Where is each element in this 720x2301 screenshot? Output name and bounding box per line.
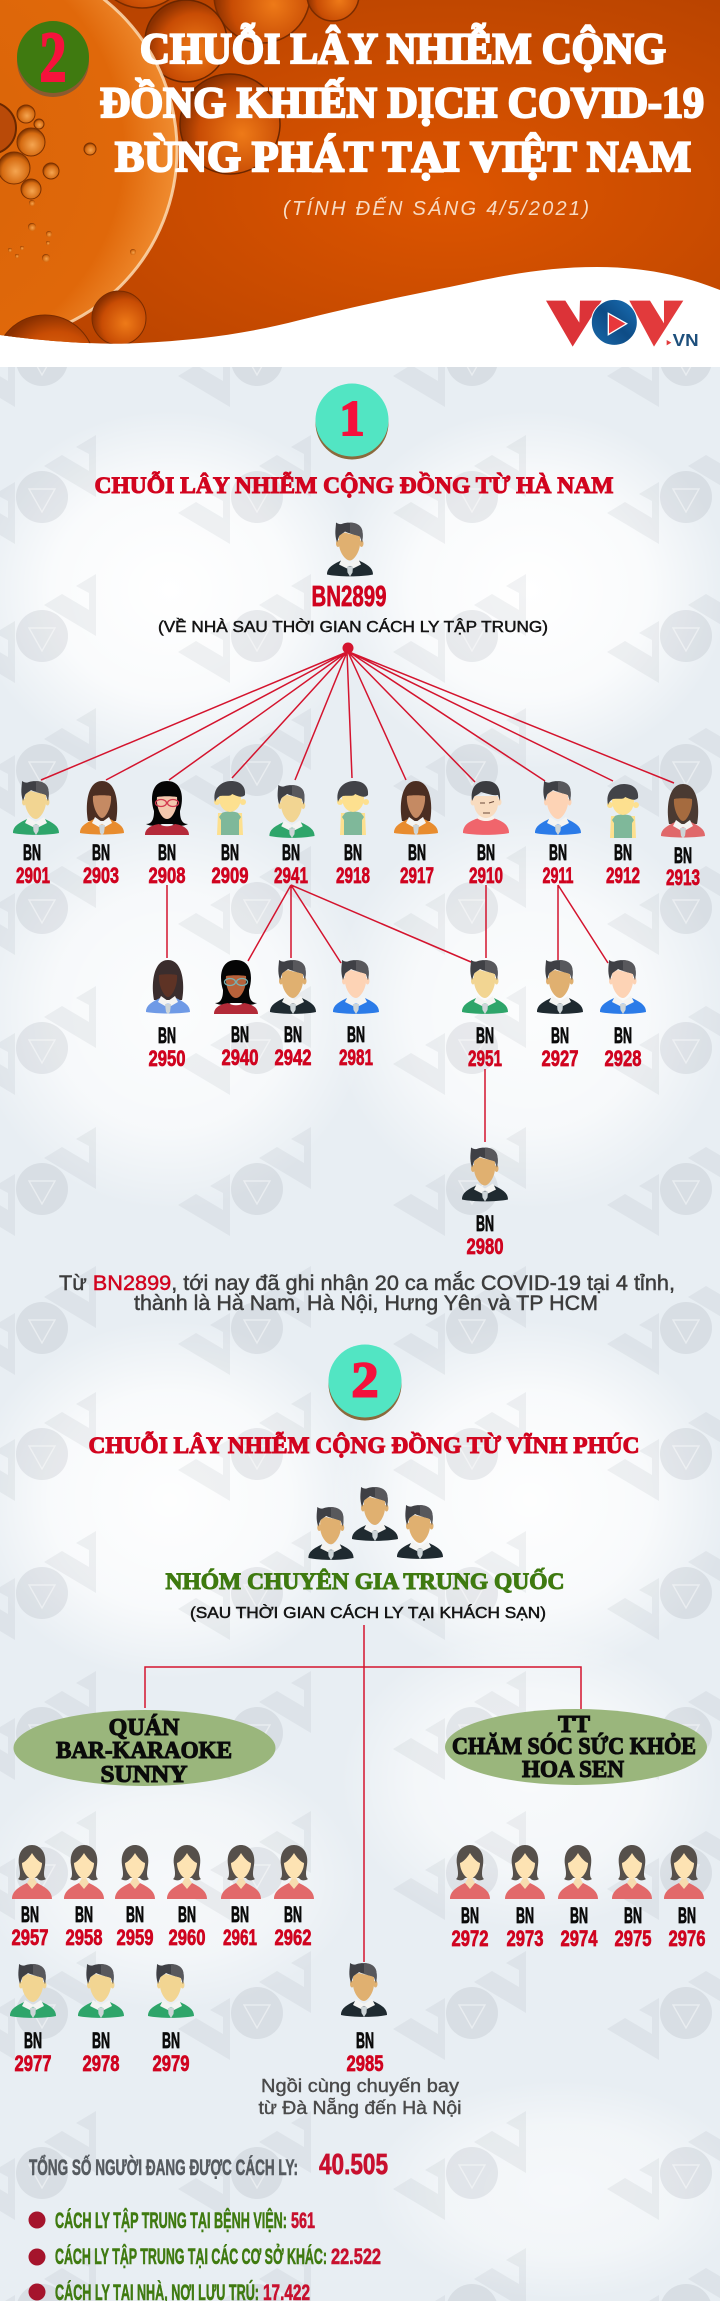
- section 1 summary text: [59, 1272, 675, 1315]
- patient 2928: BN: [614, 1023, 632, 1048]
- icon: VOV logo: VN: [673, 330, 699, 350]
- title number badge: 2: [40, 17, 66, 97]
- patient 2901: [13, 781, 59, 888]
- patient 2957: 2957: [12, 1925, 48, 1950]
- patient 2918: [336, 781, 370, 888]
- patient 2910: BN: [477, 840, 495, 865]
- patient 2961: BN: [231, 1902, 249, 1927]
- patient 2960: 2960: [168, 1925, 206, 1950]
- quarantine item: other facilities: [28, 2244, 381, 2269]
- patient 2911: [535, 781, 581, 888]
- patient 2980: 2980: [466, 1234, 504, 1259]
- patient 2911: BN: [549, 840, 567, 865]
- total quarantined: TỔNG SỐ NGƯỜI ĐANG ĐƯỢC CÁCH LY:: [29, 2154, 298, 2180]
- patient 2928: [600, 960, 646, 1071]
- note for patient 2985: từ Đà Nẵng đến Hà Nội: [258, 2098, 462, 2118]
- patient 2927: BN: [551, 1023, 569, 1048]
- patient 2976: 2976: [668, 1926, 706, 1951]
- cluster oval: Hoa Sen: CHĂM SÓC SỨC KHỎE: [452, 1733, 696, 1760]
- title: ĐỒNG KHIẾN DỊCH COVID-19: [100, 79, 704, 127]
- patient 2962: 2962: [274, 1925, 312, 1950]
- patient 2918: BN: [344, 840, 362, 865]
- patient 2959: 2959: [116, 1925, 154, 1950]
- patient 2961: 2961: [223, 1925, 257, 1950]
- patient 2978: [78, 1964, 124, 2076]
- section 1 number badge: [316, 384, 388, 460]
- orange bubble background: [0, 0, 720, 344]
- patient 2941: BN: [282, 840, 300, 865]
- patient 2957: BN: [21, 1902, 39, 1927]
- quarantine item: home: [28, 2280, 310, 2301]
- patient 2942: BN: [284, 1022, 302, 1047]
- patient 2972: BN: [461, 1903, 479, 1928]
- patient 2977: [10, 1964, 56, 2076]
- patient 2908: [145, 781, 189, 888]
- title: CHUỖI LÂY NHIỄM CỘNG: [140, 24, 666, 73]
- quarantine item: hospital: 561: [291, 2208, 315, 2233]
- patient 2973: 2973: [506, 1926, 544, 1951]
- patient 2961: [221, 1845, 261, 1950]
- total quarantined: 40.505: [319, 2149, 388, 2181]
- patient 2941: [269, 785, 315, 888]
- patient 2912: [606, 784, 640, 888]
- patient 2976: [664, 1845, 706, 1951]
- root patient BN2899: BN2899: [312, 581, 386, 613]
- icon: group of three experts: [308, 1487, 443, 1560]
- patient 2941: 2941: [274, 863, 308, 888]
- patient 2912: 2912: [606, 863, 640, 888]
- patient 2909: BN: [221, 840, 239, 865]
- patient 2911: 2911: [542, 863, 574, 888]
- patient 2975: BN: [624, 1903, 642, 1928]
- patient 2928: 2928: [604, 1046, 642, 1071]
- quarantine item: other facilities: 22.522: [331, 2244, 381, 2269]
- section 1 number badge: 1: [340, 390, 364, 446]
- patient 2942: 2942: [274, 1045, 312, 1070]
- patient 2909: 2909: [212, 863, 248, 888]
- patient 2973: BN: [516, 1903, 534, 1928]
- cluster oval: Sunny: QUÁN: [109, 1715, 180, 1741]
- patient 2960: [167, 1845, 207, 1950]
- patient 2950: 2950: [148, 1046, 186, 1071]
- patient 2973: [505, 1845, 545, 1951]
- patient 2909: [212, 781, 248, 888]
- patient 2917: 2917: [400, 863, 434, 888]
- cluster oval: Hoa Sen: TT: [558, 1712, 590, 1738]
- patient 2903: BN: [92, 840, 110, 865]
- patient 2958: [64, 1845, 104, 1950]
- patient 2940: BN: [231, 1022, 249, 1047]
- group note: (SAU THỜI GIAN CÁCH LY TẠI KHÁCH SẠN): [190, 1603, 546, 1622]
- cluster oval: Sunny: BAR-KARAOKE: [56, 1738, 232, 1764]
- patient 2910: [463, 781, 509, 888]
- patient 2972: 2972: [452, 1926, 488, 1951]
- patient 2985: BN: [356, 2028, 374, 2053]
- patient 2942: [270, 960, 316, 1070]
- patient 2951: [462, 960, 508, 1071]
- patient 2913: [661, 784, 705, 890]
- patient 2981: [333, 960, 379, 1070]
- patient 2940: [214, 960, 258, 1070]
- patient 2927: [537, 960, 583, 1071]
- tree lines: chain 1: [41, 642, 674, 1142]
- patient 2978: BN: [92, 2028, 110, 2053]
- patient 2927: 2927: [542, 1046, 578, 1071]
- patient 2951: BN: [476, 1023, 494, 1048]
- quarantine item: hospital: [28, 2208, 315, 2233]
- patient 2917: BN: [408, 840, 426, 865]
- patient 2977: 2977: [14, 2051, 52, 2076]
- patient 2975: [612, 1845, 652, 1951]
- patient 2901: 2901: [16, 863, 50, 888]
- header panel: [0, 0, 720, 367]
- tree lines: chain 2: [145, 1625, 581, 1962]
- patient 2958: 2958: [66, 1925, 102, 1950]
- patient 2950: [146, 960, 190, 1071]
- patient 2974: 2974: [560, 1926, 598, 1951]
- quarantine item: other facilities: CÁCH LY TẬP TRUNG TẠI CÁC CƠ SỞ KHÁC:: [55, 2244, 327, 2269]
- icon: VOV logo: [546, 299, 699, 350]
- patient 2958: BN: [75, 1902, 93, 1927]
- root patient BN2899: [312, 522, 386, 613]
- title: BÙNG PHÁT TẠI VIỆT NAM: [115, 134, 691, 181]
- cluster oval: Hoa Sen: HOA SEN: [522, 1757, 625, 1783]
- cluster oval: Sunny: [14, 1710, 276, 1788]
- patient 2979: 2979: [152, 2051, 190, 2076]
- patient 2917: [394, 781, 438, 888]
- patient 2976: BN: [678, 1903, 696, 1928]
- patient 2959: BN: [126, 1902, 144, 1927]
- patient 2901: BN: [23, 840, 41, 865]
- patient 2908: BN: [158, 840, 176, 865]
- quarantine item: hospital: CÁCH LY TẬP TRUNG TẠI BỆNH VIỆN:: [55, 2208, 287, 2233]
- patient 2981: BN: [347, 1022, 365, 1047]
- note for patient 2985: [258, 2076, 462, 2118]
- section 2 number badge: [328, 1344, 402, 1420]
- cluster oval: Hoa Sen: [445, 1709, 707, 1785]
- patient 2974: [558, 1845, 598, 1951]
- patient 2910: 2910: [469, 863, 503, 888]
- patient 2974: BN: [570, 1903, 588, 1928]
- patient 2985: [341, 1963, 387, 2076]
- patient 2908: 2908: [148, 863, 186, 888]
- patient 2913: 2913: [666, 865, 700, 890]
- section 1 heading: CHUỖI LÂY NHIỄM CỘNG ĐỒNG TỪ HÀ NAM: [94, 471, 614, 498]
- patient 2903: [80, 781, 124, 888]
- patient 2985: 2985: [346, 2051, 384, 2076]
- section 2 heading: CHUỖI LÂY NHIỄM CỘNG ĐỒNG TỪ VĨNH PHÚC: [88, 1431, 640, 1458]
- total quarantined: [29, 2149, 388, 2181]
- patient 2978: 2978: [82, 2051, 120, 2076]
- patient 2950: BN: [158, 1023, 176, 1048]
- title: [100, 24, 704, 181]
- patient 2972: [450, 1845, 490, 1951]
- patient 2960: BN: [178, 1902, 196, 1927]
- patient 2980: [462, 1148, 508, 1259]
- patient 2979: BN: [162, 2028, 180, 2053]
- patient 2962: [274, 1845, 314, 1950]
- patient 2912: BN: [614, 840, 632, 865]
- section 1 summary text: thành là Hà Nam, Hà Nội, Hưng Yên và TP HCM: [134, 1292, 598, 1315]
- patient 2962: BN: [284, 1902, 302, 1927]
- patient 2959: [115, 1845, 155, 1950]
- patient 2975: 2975: [614, 1926, 652, 1951]
- patient 2957: [12, 1845, 52, 1950]
- patient 2903: 2903: [83, 863, 119, 888]
- root patient note: (VỀ NHÀ SAU THỜI GIAN CÁCH LY TẬP TRUNG): [158, 617, 548, 636]
- cluster oval: Sunny: SUNNY: [100, 1762, 188, 1788]
- patient 2979: [148, 1964, 194, 2076]
- patient 2981: 2981: [339, 1045, 373, 1070]
- patient 2918: 2918: [336, 863, 370, 888]
- note for patient 2985: Ngồi cùng chuyến bay: [261, 2076, 459, 2096]
- group name: NHÓM CHUYÊN GIA TRUNG QUỐC: [166, 1568, 564, 1594]
- section 1 summary text: Từ BN2899, tới nay đã ghi nhận 20 ca mắc COVID-19 tại 4 tỉnh,: [59, 1272, 675, 1295]
- patient 2977: BN: [24, 2028, 42, 2053]
- subtitle date: (TÍNH ĐẾN SÁNG 4/5/2021): [283, 196, 589, 220]
- patient 2940: 2940: [222, 1045, 258, 1070]
- patient 2951: 2951: [468, 1046, 502, 1071]
- patient 2980: BN: [476, 1211, 494, 1236]
- section 2 number badge: 2: [352, 1351, 378, 1407]
- title number badge: [17, 17, 89, 97]
- patient 2913: BN: [674, 843, 692, 868]
